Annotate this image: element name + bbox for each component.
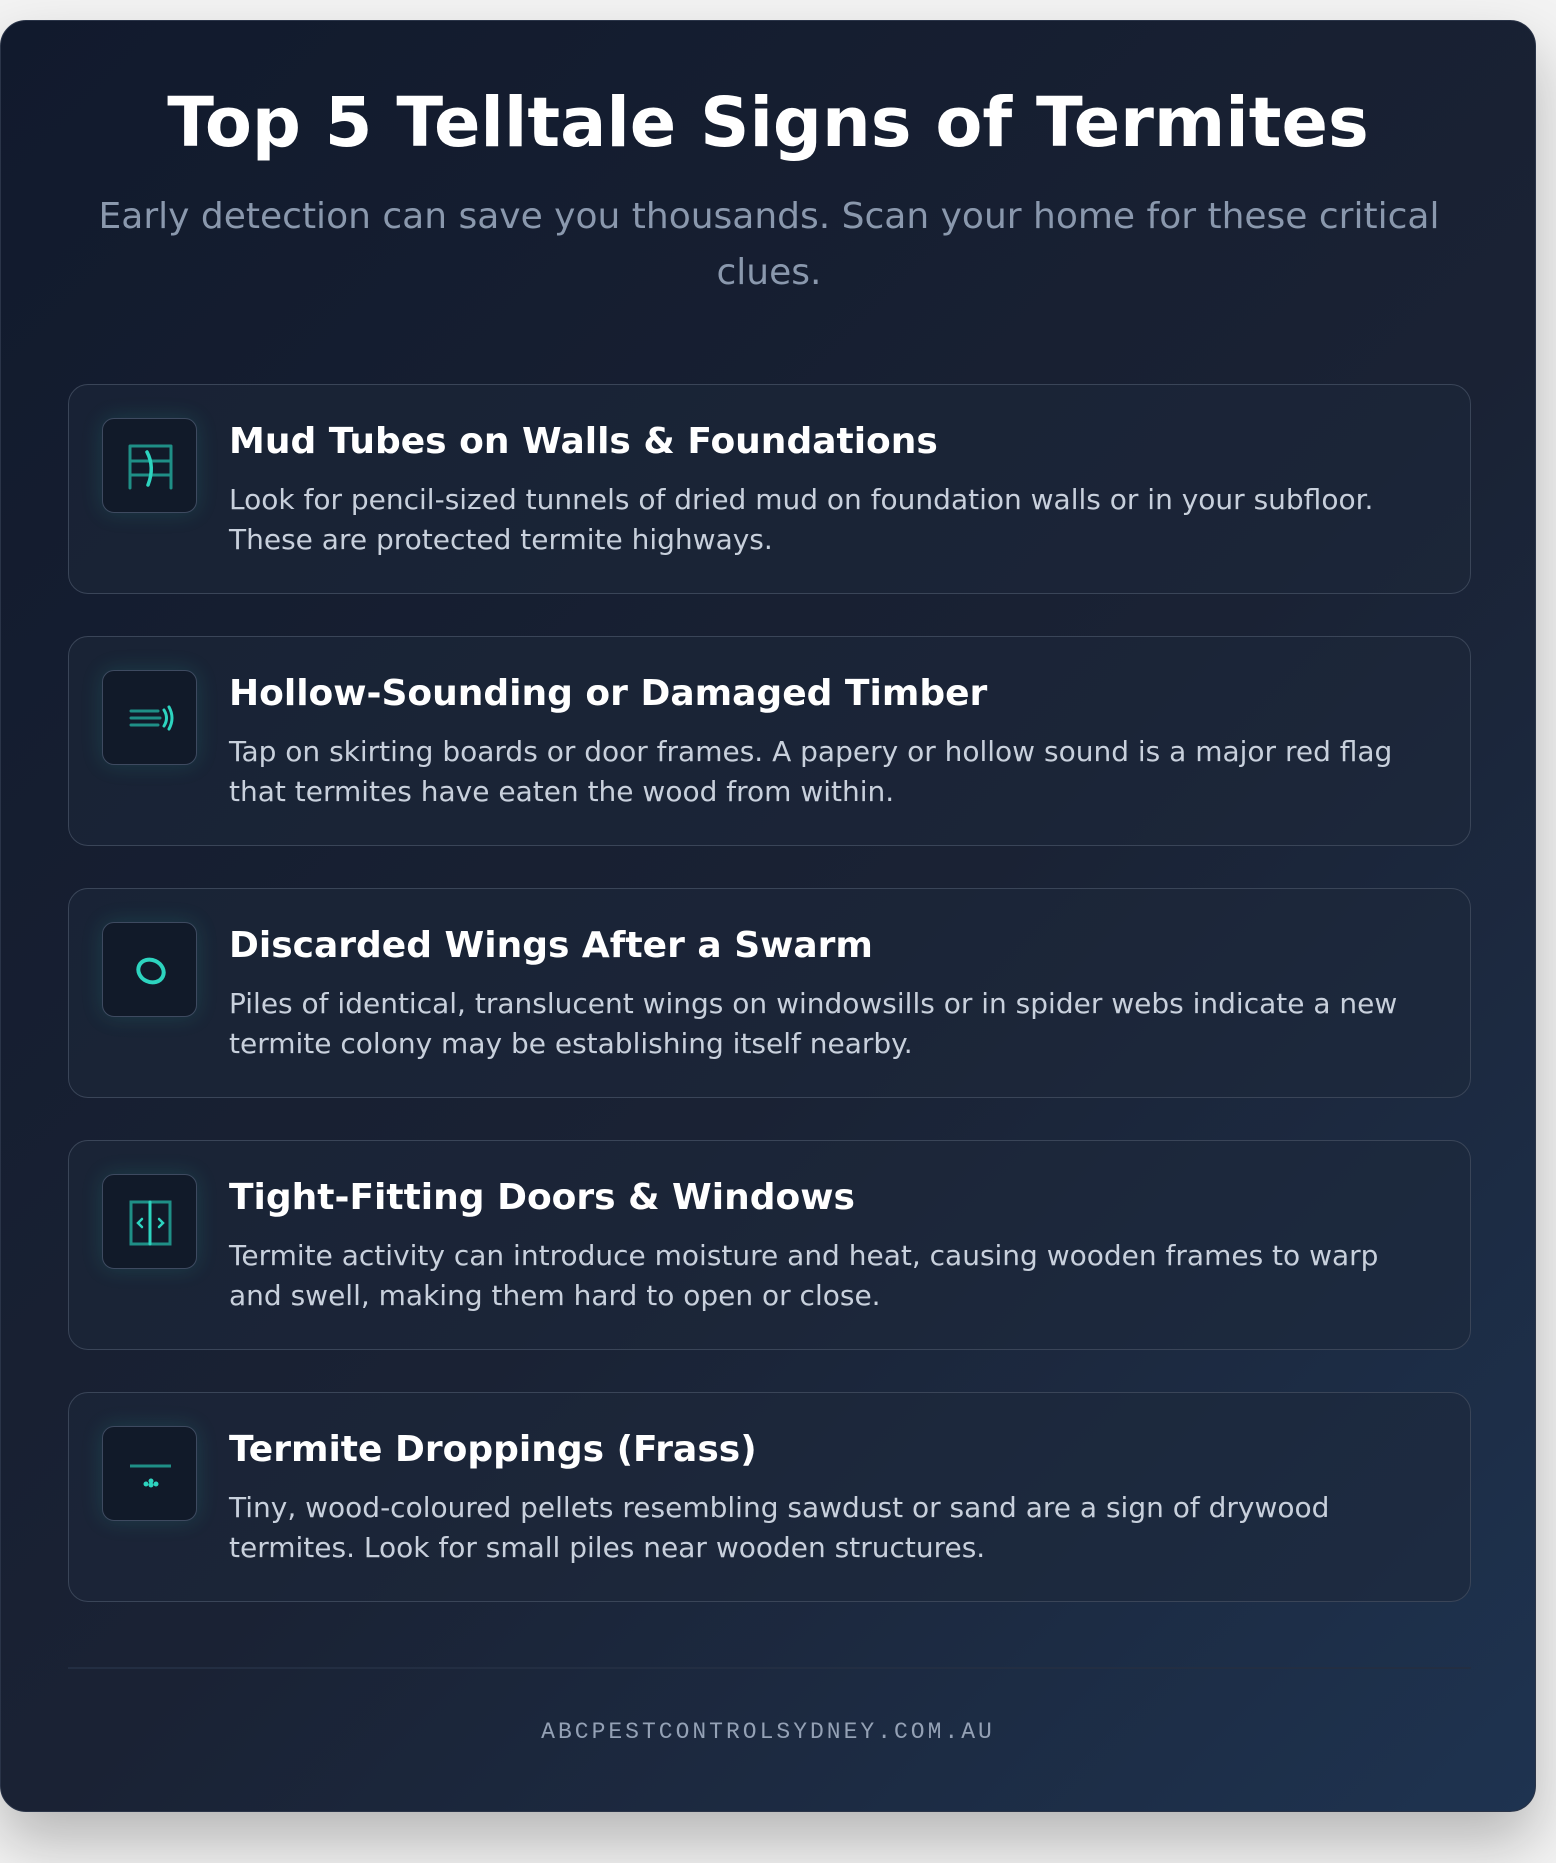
description: Tiny, wood-coloured pellets resembling sawdust or sand are a sign of drywood termites. Look for small piles near wooden structures. [229, 1491, 1329, 1564]
icon: wing [102, 922, 197, 1017]
icon: door [102, 1174, 197, 1269]
description: Look for pencil-sized tunnels of dried mud on foundation walls or in your subfloor. These are protected termite highways. [229, 483, 1373, 556]
title: Top 5 Telltale Signs of Termites [167, 83, 1369, 163]
heading: Tight-Fitting Doors & Windows [229, 1177, 855, 1218]
icon: droppings [102, 1426, 197, 1521]
panel: hollow timber [68, 636, 1471, 846]
subtitle: Early detection can save you thousands. Scan your home for these critical clues. [99, 196, 1439, 293]
heading: Mud Tubes on Walls & Foundations [229, 421, 938, 462]
description: Termite activity can introduce moisture and heat, causing wooden frames to warp and swell, making them hard to open or close. [229, 1239, 1378, 1312]
description: Piles of identical, translucent wings on windowsills or in spider webs indicate a new termite colony may be establishing itself nearby. [229, 987, 1397, 1060]
heading: Hollow-Sounding or Damaged Timber [229, 673, 987, 714]
panel: frass [68, 1392, 1471, 1602]
panel: wings [68, 888, 1471, 1098]
heading: Termite Droppings (Frass) [229, 1429, 757, 1470]
footer: ABCPESTCONTROLSYDNEY.COM.AU [541, 1719, 995, 1745]
description: Tap on skirting boards or door frames. A papery or hollow sound is a major red flag that termites have eaten the wood from within. [229, 735, 1392, 808]
heading: Discarded Wings After a Swarm [229, 925, 873, 966]
panel: doors [68, 1140, 1471, 1350]
icon: sound [102, 670, 197, 765]
panel: mud tubes [68, 384, 1471, 594]
icon: mud tube [102, 418, 197, 513]
